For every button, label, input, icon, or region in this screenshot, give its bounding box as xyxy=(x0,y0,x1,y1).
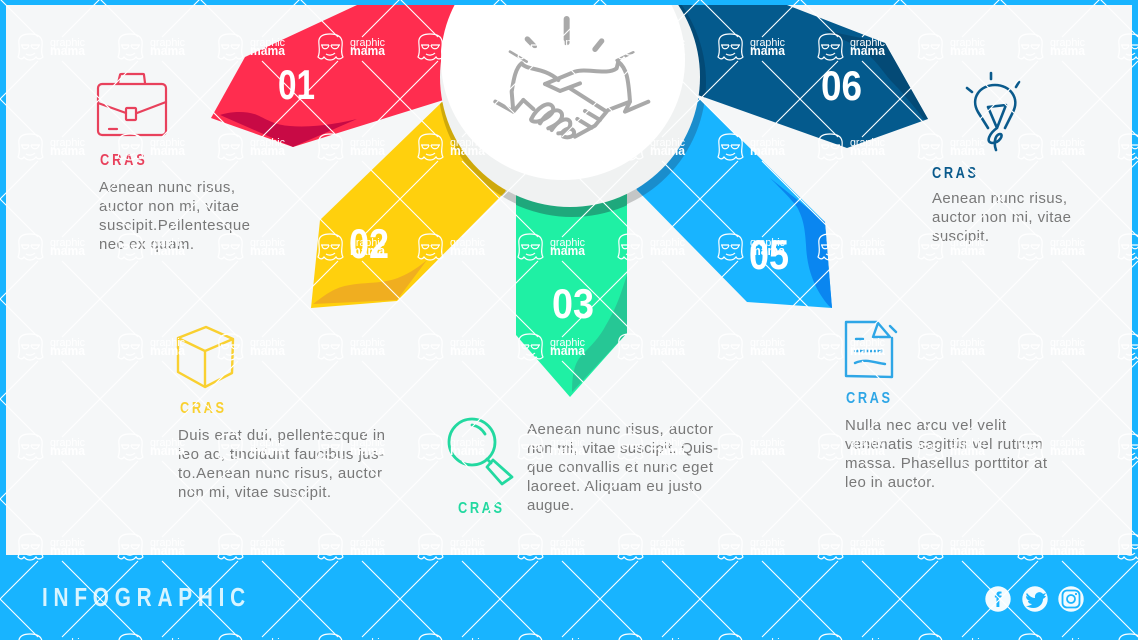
number 03: 03 xyxy=(552,280,594,327)
text block xyxy=(99,179,250,253)
number 06: 06 xyxy=(821,62,862,109)
text block: massa. Phasellus porttitor at xyxy=(845,455,1048,472)
block: 01 CRAS xyxy=(98,74,250,253)
text block: laoreet. Aliquam eu justo xyxy=(527,478,702,495)
icon: twitter xyxy=(1022,586,1048,612)
text block xyxy=(845,417,1048,491)
text block: que convallis et nunc eget xyxy=(527,459,714,476)
text block: Aenean nunc risus, xyxy=(99,179,235,196)
text block: venenatis sagittis vel rutrum xyxy=(845,436,1043,453)
icon: instagram xyxy=(1058,586,1084,612)
social icons xyxy=(985,586,1084,612)
petal 02 yellow xyxy=(311,102,506,308)
petal 01 red xyxy=(211,5,463,147)
icon: facebook: f xyxy=(994,589,1002,612)
text block: nec ex quam. xyxy=(99,236,194,253)
text block: leo ac, tincidunt faucibus jus- xyxy=(178,446,384,463)
heading: CRAS xyxy=(846,390,890,407)
text block: non mi, vitae suscipit. Quis- xyxy=(527,440,718,457)
icon: magnifier xyxy=(449,419,512,484)
text block: Nulla nec arcu vel velit xyxy=(845,417,1007,434)
heading: CRAS xyxy=(180,400,224,417)
icon: light bulb xyxy=(967,73,1019,150)
footer title: INFOGRAPHIC xyxy=(42,583,245,612)
number 01: 01 xyxy=(278,61,315,108)
text block: auctor non mi, vitae xyxy=(99,198,239,215)
petal 05 blue xyxy=(636,98,832,308)
grey shadow behind hub xyxy=(502,188,642,204)
block: 03 CRAS xyxy=(449,419,718,517)
heading: CRAS xyxy=(932,165,976,182)
icon: document xyxy=(846,322,896,377)
text block: suscipit. xyxy=(932,228,989,245)
text block xyxy=(932,190,1071,245)
text block xyxy=(178,427,385,501)
icon: handshake xyxy=(495,19,648,137)
text block: non mi, vitae suscipit. xyxy=(178,484,331,501)
petal 03 green xyxy=(516,194,627,397)
icon: cube xyxy=(178,327,233,387)
block: 05 CRAS xyxy=(845,322,1048,491)
heading: CRAS xyxy=(458,500,502,517)
text block: auctor non mi, vitae xyxy=(932,209,1071,226)
text block: suscipit.Pellentesque xyxy=(99,217,250,234)
text block: Duis erat dui, pellentesque in xyxy=(178,427,385,444)
text block: augue. xyxy=(527,497,574,514)
text block: Aenean nunc risus, auctor xyxy=(527,421,713,438)
petal 06 navy xyxy=(678,5,928,148)
central hub circle xyxy=(440,0,700,207)
text block xyxy=(527,421,718,514)
number 02: 02 xyxy=(349,220,389,267)
text block: leo in auctor. xyxy=(845,474,935,491)
heading: CRAS xyxy=(100,152,145,169)
block: 02 CRAS xyxy=(178,327,385,501)
number 05: 05 xyxy=(749,231,789,278)
text block: to.Aenean nunc risus, auctor xyxy=(178,465,382,482)
icon: briefcase xyxy=(98,74,166,135)
block: 06 CRAS xyxy=(932,73,1071,245)
text block: Aenean nunc risus, xyxy=(932,190,1067,207)
